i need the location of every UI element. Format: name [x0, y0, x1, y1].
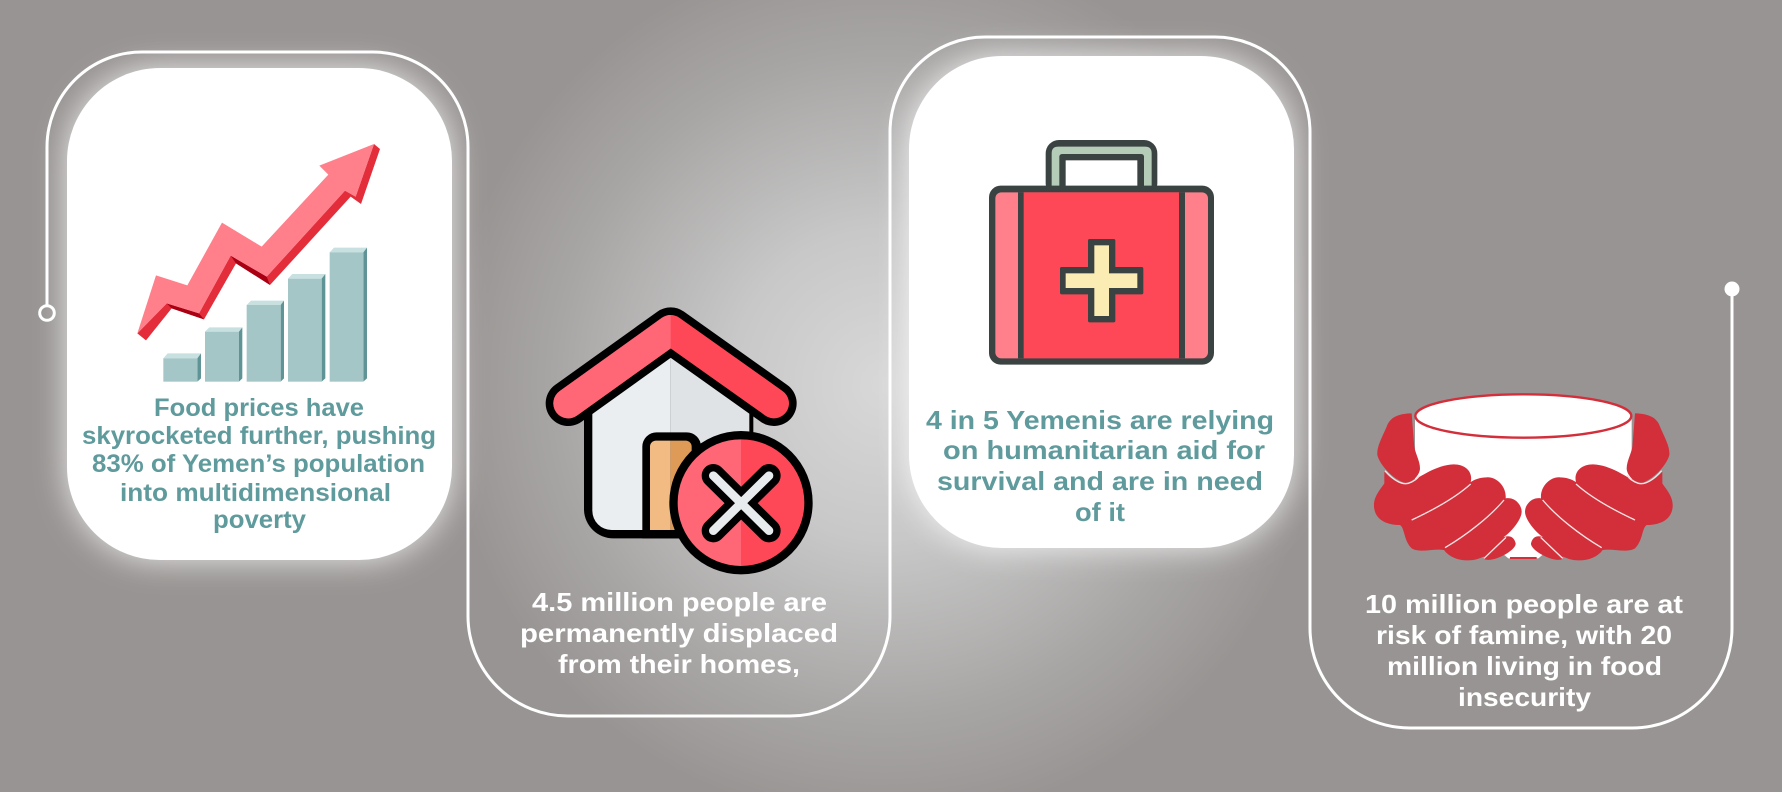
- text: displaced people: from their homes,: [558, 649, 800, 679]
- text: humanitarian aid: survival and are in need: [937, 466, 1263, 496]
- text: food prices: skyrocketed further, pushing: [82, 422, 436, 450]
- text: displaced people: [520, 587, 838, 679]
- start node: [40, 306, 54, 320]
- text: food prices: poverty: [213, 506, 306, 534]
- panel: famine risk: [1365, 394, 1683, 712]
- text: famine risk: insecurity: [1458, 682, 1592, 712]
- text: famine risk: [1365, 589, 1683, 712]
- left hand: [1374, 413, 1522, 560]
- panel: food prices card: [67, 68, 452, 560]
- panel: humanitarian aid card: [909, 56, 1294, 548]
- panel: displaced people: [520, 330, 838, 679]
- text: food prices: [82, 394, 436, 534]
- icon: rising arrow and bar chart: [137, 144, 380, 382]
- text: food prices: Food prices have: [154, 394, 364, 422]
- text: food prices: 83% of Yemen’s population: [92, 450, 425, 478]
- text: displaced people: permanently displaced: [520, 618, 838, 648]
- right hand: [1525, 413, 1673, 560]
- icon: house with cross: [568, 330, 813, 574]
- text: humanitarian aid: on humanitarian aid for: [943, 435, 1265, 465]
- icon: first aid kit: [989, 140, 1214, 365]
- text: humanitarian aid: [926, 405, 1274, 527]
- end node: [1724, 282, 1740, 296]
- text: famine risk: risk of famine, with 20: [1376, 620, 1672, 650]
- icon: red arrow: [137, 144, 380, 340]
- text: famine risk: 10 million people are at: [1365, 589, 1683, 619]
- icon: hands holding empty bowl: [1374, 394, 1673, 560]
- text: displaced people: 4.5 million people are: [532, 587, 827, 617]
- text: famine risk: million living in food: [1387, 651, 1662, 681]
- text: humanitarian aid: of it: [1075, 497, 1125, 527]
- text: food prices: into multidimensional: [120, 479, 391, 507]
- bar chart: [163, 248, 367, 382]
- text: humanitarian aid: 4 in 5 Yemenis are relying: [926, 405, 1274, 435]
